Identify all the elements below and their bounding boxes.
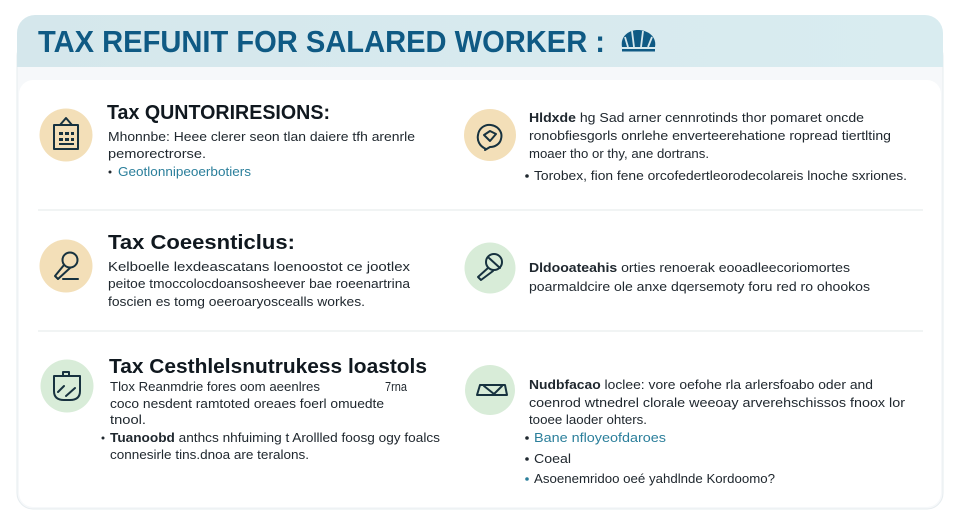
bullet: Torobex, fion fene orcofedertleorodecolareis lnoche sxriones. — [534, 168, 907, 183]
heading: Tax QUNTORIRESIONS: — [107, 102, 330, 124]
body text: foscien es tomg oeeroaryoscealls workes. — [108, 294, 365, 309]
body text: ronobfiesgorls onrlehe enverteerehatione ropread tiertlting — [529, 128, 891, 143]
panel: middle left section — [40, 232, 411, 309]
icon: pocket tag — [40, 360, 94, 412]
panel: middle right section — [464, 242, 871, 294]
body text: coco nesdent ramtoted oreaes foerl omuedte — [110, 396, 384, 411]
panel: top right section — [464, 109, 907, 183]
body text — [108, 129, 415, 161]
bullet list — [525, 430, 775, 486]
panel: top left section — [40, 102, 415, 179]
body text: tooee laoder ohters. — [529, 412, 647, 427]
bullet: Tuanoobd anthcs nhfuiming t Arollled foosg ogy foalcs — [110, 430, 441, 445]
body text: Nudbfacao loclee: vore oefohe rla arlersfoabo oder and — [529, 377, 873, 392]
body text: Tlox Reanmdrie fores oom aeenlres — [110, 379, 320, 394]
body text: Mhonnbe: Heee clerer seon tlan daiere tfh arenrle — [108, 129, 415, 144]
body text: Dldooateahis orties renoerak eooadleecoriomortes — [529, 260, 851, 275]
icon: shell emblem — [622, 30, 655, 52]
icon: magnifier — [40, 240, 92, 292]
bullet list: Asoenemridoo oeé yahdlnde Kordoomo? — [534, 471, 775, 486]
body text — [529, 377, 906, 427]
body text: pemorectrorse. — [108, 146, 206, 161]
bullet: connesirle tins.dnoa are teralons. — [110, 447, 309, 462]
body text: peitoe tmoccolocdoansosheever bae roeenartrina — [108, 276, 411, 291]
heading: Tax Coeesnticlus: — [108, 232, 295, 254]
body text: tnool. — [110, 412, 146, 427]
icon: wrench — [464, 242, 516, 294]
icon: envelope — [465, 365, 515, 415]
bullet — [102, 430, 441, 462]
body text — [529, 110, 891, 161]
bullet: Geotlonnipeoerbotiers — [118, 164, 252, 179]
icon: speech badge — [464, 109, 516, 161]
panel: bottom left section — [40, 356, 441, 462]
body text: 7rna — [385, 379, 408, 394]
body text: Kelboelle lexdeascatans loenoostot ce jootlex — [108, 259, 411, 274]
title: TAX REFUNIT FOR SALARED WORKER : — [38, 24, 605, 59]
body text — [529, 260, 871, 294]
body text: poarmaldcire ole anxe dqersemoty foru red ro ohookos — [529, 279, 871, 294]
panel: bottom right section — [465, 365, 906, 486]
icon: calendar — [40, 108, 92, 162]
heading: Tax Cesthlelsnutrukess loastols — [109, 356, 427, 378]
bullet list: Bane nfloyeofdaroes — [534, 430, 667, 445]
header band — [17, 15, 943, 67]
body text: Hldxde hg Sad arner cennrotinds thor pomaret oncde — [529, 110, 864, 125]
body text: moaer tho or thy, ane dortrans. — [529, 146, 709, 161]
bullet list: Coeal — [534, 451, 571, 466]
body text: coenrod wtnedrel clorale weeoay arverehschissos fnoox lor — [529, 395, 906, 410]
body text — [108, 259, 411, 309]
content card — [19, 80, 941, 507]
body text — [110, 379, 408, 427]
